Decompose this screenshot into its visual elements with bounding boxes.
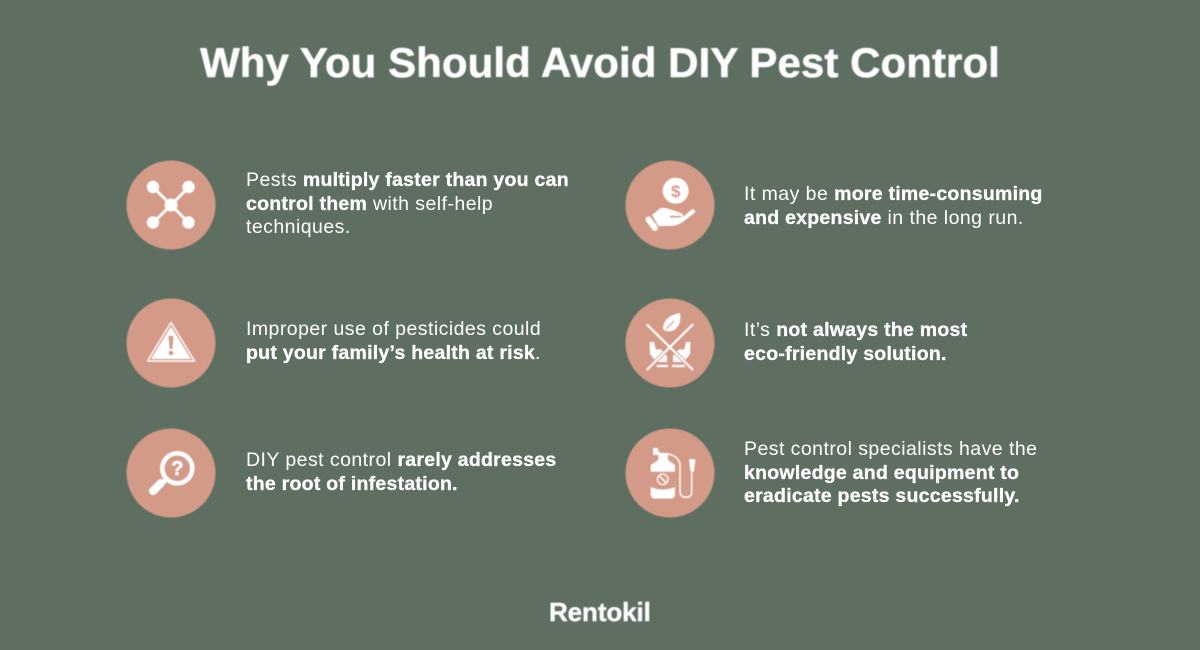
- panel: pesticides risk: [126, 298, 541, 388]
- text: root of infestation: [246, 449, 556, 494]
- text: time-consuming: and expensive in the long run.: [744, 206, 1024, 228]
- icon: spray bottle: [624, 428, 716, 518]
- text: eco-friendly: It’s not always the most: [744, 319, 967, 341]
- text: multiply faster: control them with self-help: [246, 192, 493, 214]
- icon: hand with coin: $: [671, 182, 681, 201]
- icon: magnifying glass: [126, 428, 216, 518]
- panel: time-consuming: [624, 160, 1043, 250]
- text: time-consuming: [744, 183, 1043, 228]
- text: specialists: eradicate pests successfully.: [744, 485, 1020, 507]
- panel: eco-friendly: [624, 298, 968, 388]
- title: Why You Should Avoid DIY Pest Control: [200, 39, 1000, 86]
- panel: specialists: [624, 428, 1037, 518]
- text: root of infestation: DIY pest control rarely addresses: [246, 449, 556, 471]
- text: pesticides risk: put your family’s health at risk.: [246, 342, 541, 364]
- text: specialists: Pest control specialists have the: [744, 438, 1037, 460]
- panel: multiply faster: [126, 160, 569, 250]
- logo: Rentokil: Rentokil: [549, 597, 651, 627]
- icon: magnifying glass: ?: [171, 458, 183, 480]
- text: multiply faster: Pests multiply faster than you can: [246, 169, 569, 191]
- icon: network nodes: [126, 160, 216, 250]
- icon: warning triangle: [126, 298, 216, 388]
- text: root of infestation: the root of infestation.: [246, 472, 458, 494]
- icon: crossed-out hands and leaf: [624, 298, 716, 388]
- icon: hand with coin: [624, 160, 716, 250]
- text: multiply faster: [246, 169, 569, 238]
- text: eco-friendly: [744, 319, 968, 364]
- text: pesticides risk: Improper use of pesticides could: [246, 318, 541, 340]
- text: pesticides risk: [246, 318, 541, 364]
- text: specialists: knowledge and equipment to: [744, 462, 1019, 484]
- text: multiply faster: techniques.: [246, 216, 351, 238]
- text: eco-friendly: eco-friendly solution.: [744, 342, 947, 364]
- text: time-consuming: It may be more time-consuming: [744, 183, 1043, 205]
- panel: root of infestation: [126, 428, 556, 518]
- text: specialists: [744, 438, 1037, 507]
